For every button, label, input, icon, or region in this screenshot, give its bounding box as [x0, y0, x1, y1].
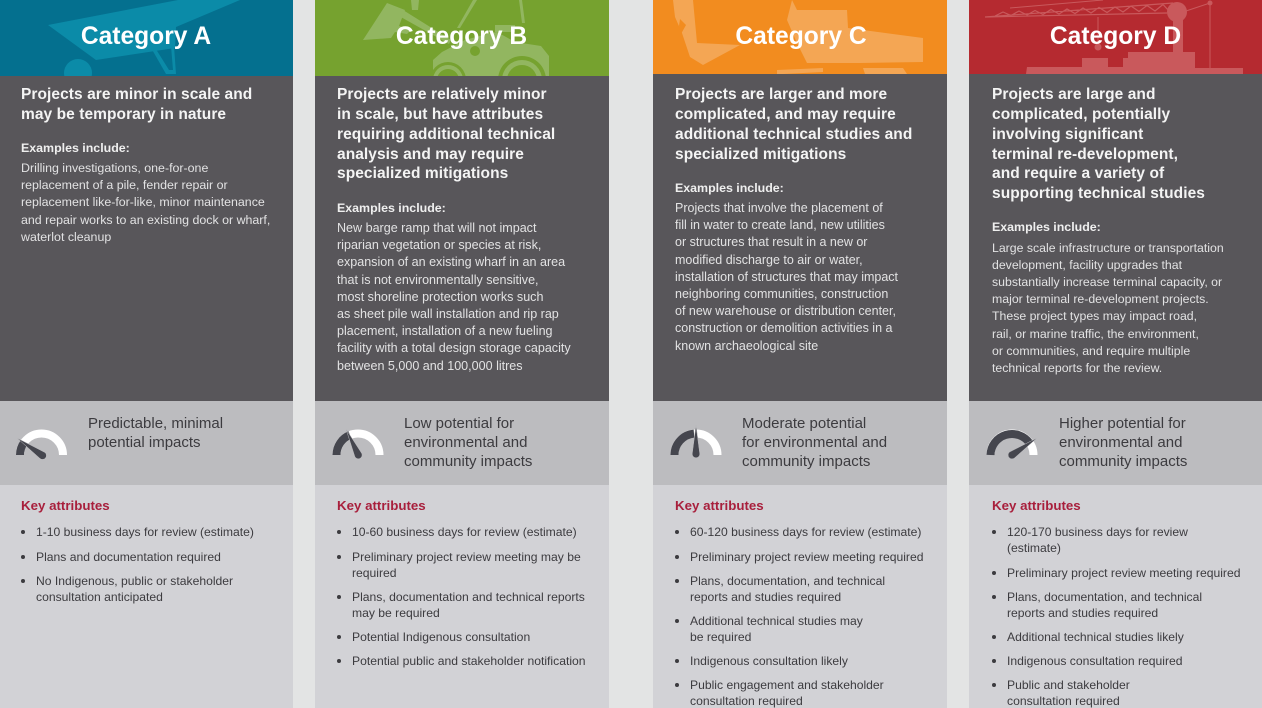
heading: project scale: and require a variety of	[992, 165, 1164, 182]
heading: project scale: Projects are large and	[992, 86, 1156, 103]
text: impact: potential impacts	[88, 434, 201, 451]
text: impact: community impacts	[404, 453, 532, 470]
list item: Additional technical studies likely	[1007, 630, 1184, 644]
heading: project scale	[992, 86, 1205, 202]
heading: Category A: Category A	[81, 23, 211, 50]
heading: project scale: supporting technical studies	[992, 185, 1205, 202]
label: examples: Examples include:	[337, 201, 446, 215]
icon: gauge moderate	[670, 428, 722, 458]
heading: project scale: may be temporary in nature	[21, 106, 226, 123]
text: impact: community impacts	[1059, 453, 1187, 470]
list item: be required	[690, 630, 751, 644]
impact band	[653, 401, 947, 485]
heading: Category B: Category B	[396, 23, 527, 50]
list item	[352, 549, 581, 581]
heading: key attributes: Key attributes	[337, 498, 426, 513]
text: examples: replacement of a pile, fender repair or	[21, 178, 228, 192]
list item: No Indigenous, public or stakeholder	[36, 574, 233, 588]
list item: 10-60 business days for review (estimate)	[352, 525, 577, 539]
list item: Potential Indigenous consultation	[352, 630, 530, 644]
text: examples	[675, 201, 898, 353]
text: examples: construction or demolition activities in a	[675, 321, 892, 335]
list item: Plans, documentation, and technical	[690, 574, 885, 588]
text: impact: community impacts	[742, 453, 870, 470]
list item: may be required	[352, 606, 440, 620]
panel: Category D	[969, 0, 1262, 708]
header: Category A with wheelbarrow	[0, 0, 293, 76]
panel: Category C	[653, 0, 947, 708]
icon: excavator silhouette	[673, 0, 923, 74]
text: examples: expansion of an existing wharf in an area	[337, 255, 565, 269]
icon: crane and terminal silhouette	[985, 0, 1243, 74]
text: impact: environmental and	[1059, 434, 1182, 451]
text: examples: fill in water to create land, new utilities	[675, 218, 885, 232]
list item: Preliminary project review meeting required	[1007, 566, 1240, 580]
list item: Indigenous consultation required	[1007, 654, 1182, 668]
text: examples: as sheet pile wall installation and rip rap	[337, 307, 559, 321]
icon: loader silhouette	[363, 0, 549, 76]
text: examples: facility with a total design storage capacity	[337, 341, 571, 355]
text: examples: neighboring communities, construction	[675, 287, 888, 301]
text: impact: Low potential for	[404, 415, 514, 432]
list item: reports and studies required	[690, 590, 841, 604]
heading: project scale: in scale, but have attributes	[337, 106, 543, 123]
label: examples: Examples include:	[992, 220, 1101, 234]
heading: Category D: Category D	[1050, 23, 1181, 50]
list item: Public engagement and stakeholder	[690, 678, 884, 692]
text: examples: technical reports for the review.	[992, 361, 1162, 375]
list item: consultation anticipated	[36, 590, 163, 604]
panel: Category B	[315, 0, 609, 708]
heading: key attributes: Key attributes	[21, 498, 110, 513]
text: examples: waterlot cleanup	[21, 230, 111, 244]
list item: 60-120 business days for review (estimate)	[690, 525, 921, 539]
list item	[36, 573, 233, 605]
list item: required	[352, 566, 397, 580]
list item: Public and stakeholder	[1007, 678, 1130, 692]
text: examples	[21, 161, 270, 244]
icon: wheelbarrow silhouette	[48, 0, 240, 76]
list item: Plans and documentation required	[36, 550, 221, 564]
list item	[1007, 524, 1188, 556]
text: examples: Projects that involve the placement of	[675, 201, 883, 215]
list item: Potential public and stakeholder notification	[352, 654, 586, 668]
impact band	[969, 401, 1262, 485]
heading: project scale: complicated, potentially	[992, 106, 1170, 123]
heading: key attributes: Key attributes	[992, 498, 1081, 513]
heading: project scale: additional technical studies and	[675, 126, 912, 143]
text: examples: installation of structures that may impact	[675, 270, 898, 284]
heading: project scale: specialized mitigations	[675, 146, 846, 163]
text: examples: major terminal re-development projects.	[992, 292, 1209, 306]
header: Category D with crane	[969, 0, 1262, 74]
list item	[690, 677, 884, 708]
text: examples: These project types may impact road,	[992, 309, 1197, 323]
list item: Preliminary project review meeting may be	[352, 550, 581, 564]
text: impact	[404, 415, 532, 470]
text: examples: Drilling investigations, one-for-one	[21, 161, 208, 175]
list item: Additional technical studies may	[690, 614, 863, 628]
list item: Preliminary project review meeting required	[690, 550, 923, 564]
summary block	[969, 74, 1262, 401]
heading: project scale: involving significant	[992, 126, 1143, 143]
list item: Plans, documentation and technical reports	[352, 590, 585, 604]
text: impact	[1059, 415, 1187, 470]
list item: Indigenous consultation likely	[690, 654, 848, 668]
panel: Category A	[0, 0, 293, 708]
text: impact: Higher potential for	[1059, 415, 1186, 432]
list item: 120-170 business days for review	[1007, 525, 1188, 539]
text: examples: modified discharge to air or water,	[675, 253, 863, 267]
heading: project scale: Projects are relatively minor	[337, 86, 547, 103]
list item	[352, 589, 585, 621]
list item: reports and studies required	[1007, 606, 1158, 620]
text: examples: of new warehouse or distribution center,	[675, 304, 896, 318]
impact band	[0, 401, 293, 485]
heading: project scale	[21, 86, 252, 123]
heading: project scale: terminal re-development,	[992, 146, 1178, 163]
list item	[1007, 589, 1202, 621]
text: impact	[88, 415, 223, 451]
icon: gauge low	[332, 430, 384, 459]
text: examples: Large scale infrastructure or transportation	[992, 240, 1224, 254]
text: impact: Predictable, minimal	[88, 415, 223, 432]
summary block	[653, 74, 947, 401]
text: examples	[992, 240, 1224, 375]
heading: project scale: specialized mitigations	[337, 165, 508, 182]
heading: project scale: Projects are minor in scale and	[21, 86, 252, 103]
impact band	[315, 401, 609, 485]
text: impact	[742, 415, 887, 470]
text: examples: most shoreline protection works such	[337, 290, 543, 304]
summary block	[0, 76, 293, 401]
list item: (estimate)	[1007, 541, 1061, 555]
heading: project scale: requiring additional technical	[337, 126, 555, 143]
text: examples: substantially increase terminal capacity, or	[992, 275, 1222, 289]
text: examples: known archaeological site	[675, 339, 818, 353]
text: examples: that is not environmentally sensitive,	[337, 273, 539, 287]
text: examples: and repair works to an existing dock or wharf,	[21, 213, 270, 227]
text: examples: riparian vegetation or species at risk,	[337, 238, 541, 252]
summary block	[315, 76, 609, 401]
list item: 1-10 business days for review (estimate)	[36, 525, 254, 539]
list item	[1007, 677, 1130, 708]
list item: consultation required	[1007, 694, 1120, 708]
text: examples: or structures that result in a new or	[675, 235, 867, 249]
text: examples: or communities, and require multiple	[992, 344, 1190, 358]
list item: consultation required	[690, 694, 803, 708]
heading: project scale: complicated, and may require	[675, 106, 896, 123]
label: examples: Examples include:	[675, 181, 784, 195]
list item: Plans, documentation, and technical	[1007, 590, 1202, 604]
header: Category B with loader	[315, 0, 609, 76]
text: examples: development, facility upgrades that	[992, 258, 1182, 272]
label: examples: Examples include:	[21, 141, 130, 155]
header: Category C with excavator	[653, 0, 947, 74]
heading: project scale	[337, 86, 555, 182]
heading: project scale: analysis and may require	[337, 146, 524, 163]
text: examples: placement, installation of a new fueling	[337, 324, 553, 338]
heading: project scale: Projects are larger and more	[675, 86, 887, 103]
list item	[690, 573, 885, 605]
heading: Category C: Category C	[735, 23, 867, 50]
text: impact: Moderate potential	[742, 415, 866, 432]
text: impact: for environmental and	[742, 434, 887, 451]
heading: project scale	[675, 86, 912, 163]
text: examples: replacement like-for-like, minor maintenance	[21, 195, 265, 209]
text: impact: environmental and	[404, 434, 527, 451]
icon: gauge minimal	[16, 430, 67, 460]
text: examples	[337, 221, 571, 373]
list item	[690, 613, 863, 645]
icon: gauge higher	[986, 430, 1038, 459]
text: examples: New barge ramp that will not impact	[337, 221, 536, 235]
text: examples: rail, or marine traffic, the environment,	[992, 327, 1199, 341]
heading: key attributes: Key attributes	[675, 498, 764, 513]
text: examples: between 5,000 and 100,000 litres	[337, 359, 523, 373]
